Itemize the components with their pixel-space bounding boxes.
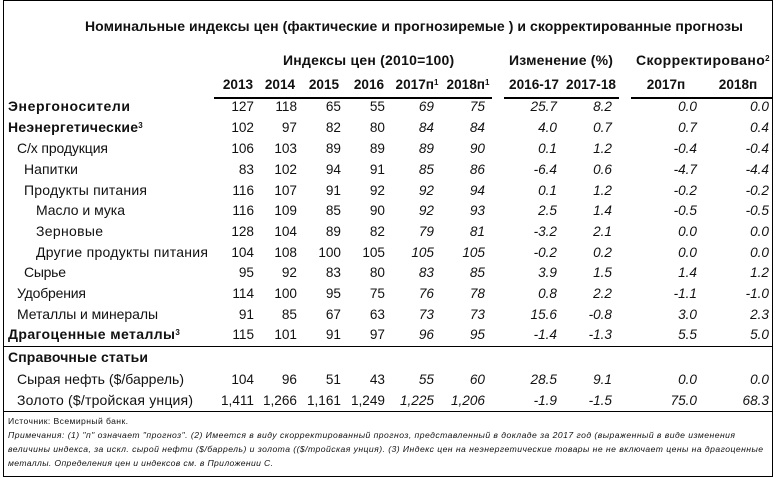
data: forecasts, changes, adjustments: 1.5 [593,265,612,280]
data: forecasts, changes, adjustments: 0.0 [750,99,769,114]
footnotes: металлы. Определения цен и индексов см. в Приложении С. [8,458,273,468]
data: forecasts, changes, adjustments: 95 [470,327,485,342]
data: forecasts, changes, adjustments: -0.4 [674,141,697,156]
data: forecasts, changes, adjustments: 76 [419,286,434,301]
row labels: 3 [138,121,143,130]
data: forecasts, changes, adjustments: 2.1 [592,224,612,239]
footnotes: величины индекса, за искл. сырой нефти ($/баррель) и золота (($/тройская унция). (3) Индекс цен на неэнергетические товары не не включает цены на драгоценные [8,444,763,454]
row labels: Энергоносители [8,98,130,114]
data: price indices actual: 85 [282,307,297,322]
group heading: adjusted: 2 [765,54,770,63]
data: price indices actual: 91 [239,307,254,322]
data: forecasts, changes, adjustments: 0.6 [593,162,612,177]
data: forecasts, changes, adjustments: 25.7 [530,99,557,114]
data: forecasts, changes, adjustments: 0.0 [678,372,697,387]
data: forecasts, changes, adjustments: 60 [470,372,485,387]
group heading: price indices: Индексы цен (2010=100) [283,52,454,68]
data: forecasts, changes, adjustments: 89 [419,141,434,156]
data: price indices actual: 55 [370,99,385,114]
data: price indices actual [221,99,385,408]
data: price indices actual: 90 [370,203,385,218]
data: forecasts, changes, adjustments: -0.5 [674,203,697,218]
data: forecasts, changes, adjustments: 9.1 [593,372,612,387]
data: forecasts, changes, adjustments: -4.7 [674,162,697,177]
data: forecasts, changes, adjustments: -0.2 [534,245,557,260]
data: price indices actual: 100 [318,245,341,260]
table header [214,52,772,99]
data: forecasts, changes, adjustments: 5.5 [678,327,697,342]
data: price indices actual: 96 [282,372,297,387]
data: price indices actual: 65 [326,99,341,114]
data: forecasts, changes, adjustments: -1.0 [746,286,769,301]
data: forecasts, changes, adjustments: 73 [419,307,434,322]
data: forecasts, changes, adjustments: 85 [470,265,485,280]
data: price indices actual: 118 [275,99,297,114]
footnotes [8,416,763,468]
row labels: Удобрения [17,285,86,301]
data: forecasts, changes, adjustments: 0.7 [593,120,612,135]
data: price indices actual: 94 [326,162,341,177]
data: price indices actual: 82 [326,120,341,135]
data: forecasts, changes, adjustments: 73 [470,307,485,322]
year labels: 2017п [647,77,685,92]
data: forecasts, changes, adjustments: 4.0 [538,120,557,135]
row labels: Неэнергетические [8,119,138,135]
data: forecasts, changes, adjustments: 1.4 [593,203,612,218]
data: forecasts, changes, adjustments: 105 [462,245,485,260]
data: price indices actual: 89 [326,224,341,239]
year labels: 2014 [265,77,296,92]
data: forecasts, changes, adjustments: 85 [419,162,434,177]
data: forecasts, changes, adjustments: 96 [419,327,434,342]
data: forecasts, changes, adjustments: 0.1 [538,183,557,198]
data: price indices actual: 92 [282,265,297,280]
data: forecasts, changes, adjustments: 1.2 [593,183,612,198]
data: forecasts, changes, adjustments: 3.9 [538,265,557,280]
row labels: Масло и мука [36,202,125,218]
data: forecasts, changes, adjustments: 2.2 [592,286,612,301]
data: forecasts, changes, adjustments: -3.2 [534,224,557,239]
data: forecasts, changes, adjustments: 1.2 [593,141,612,156]
data: price indices actual: 83 [239,162,254,177]
data: forecasts, changes, adjustments: 78 [470,286,485,301]
row labels [8,98,208,408]
data: forecasts, changes, adjustments: 15.6 [531,307,557,322]
data: forecasts, changes, adjustments: -1.9 [534,393,557,408]
data: price indices actual: 1,161 [307,393,341,408]
data: forecasts, changes, adjustments: 92 [419,203,434,218]
data: price indices actual: 102 [274,162,297,177]
data: forecasts, changes, adjustments: 94 [470,183,485,198]
data: forecasts, changes, adjustments: 75 [470,99,485,114]
data: price indices actual: 67 [326,307,341,322]
data: price indices actual: 116 [232,203,254,218]
data: price indices actual: 104 [231,245,254,260]
data: price indices actual: 1,411 [221,393,254,408]
data: price indices actual: 102 [231,120,254,135]
year labels: 2017п [396,77,434,92]
data: forecasts, changes, adjustments: 3.0 [678,307,697,322]
data: forecasts, changes, adjustments: 0.0 [678,224,697,239]
row labels: Сырье [24,264,66,280]
data: forecasts, changes, adjustments: -1.3 [589,327,612,342]
data: forecasts, changes, adjustments: 2.3 [749,307,769,322]
data: price indices actual: 103 [274,141,297,156]
data: price indices actual: 75 [370,286,385,301]
data: forecasts, changes, adjustments: -0.5 [746,203,769,218]
data: forecasts, changes, adjustments: 79 [419,224,434,239]
data: price indices actual: 80 [370,265,385,280]
data: price indices actual: 116 [232,183,254,198]
data: forecasts, changes, adjustments: 68.3 [743,393,769,408]
data: price indices actual: 89 [326,141,341,156]
data: forecasts, changes, adjustments: 0.0 [750,224,769,239]
row labels: Золото ($/тройская унция) [17,392,193,408]
data: price indices actual: 91 [326,183,341,198]
row labels: Напитки [24,161,78,177]
data: forecasts, changes, adjustments: 0.8 [538,286,557,301]
data: price indices actual: 91 [326,327,341,342]
data: price indices actual: 101 [274,327,297,342]
year labels: 2018п [447,77,485,92]
data: price indices actual: 89 [370,141,385,156]
data: forecasts, changes, adjustments: -0.4 [746,141,769,156]
data: price indices actual: 85 [326,203,341,218]
year labels: 2016 [354,77,385,92]
data: forecasts, changes, adjustments: 92 [419,183,434,198]
row labels: Зерновые [36,223,103,239]
data: forecasts, changes, adjustments: -1.5 [589,393,612,408]
data: forecasts, changes, adjustments: 81 [470,224,485,239]
year labels: 2013 [223,77,254,92]
data: forecasts, changes, adjustments: -1.1 [674,286,697,301]
data: forecasts, changes, adjustments: 0.4 [750,120,769,135]
data: forecasts, changes, adjustments: 0.7 [678,120,697,135]
row labels: 3 [175,328,180,337]
year labels: 2017-18 [566,77,616,92]
data: price indices actual: 108 [274,245,297,260]
data: forecasts, changes, adjustments: 105 [411,245,434,260]
data: price indices actual: 95 [239,265,254,280]
data: forecasts, changes, adjustments: -0.2 [674,183,697,198]
group heading: change: Изменение (%) [509,52,613,68]
data: forecasts, changes, adjustments: 1,206 [451,393,485,408]
data: price indices actual: 128 [231,224,254,239]
data: price indices actual: 127 [231,99,254,114]
data: forecasts, changes, adjustments: 0.0 [750,245,769,260]
data: forecasts, changes, adjustments: 84 [470,120,485,135]
data: forecasts, changes, adjustments: 83 [419,265,434,280]
row labels: Драгоценные металлы [8,326,175,342]
year labels: 1 [434,78,439,87]
data: price indices actual: 95 [326,286,341,301]
data: price indices actual: 97 [282,120,297,135]
data: forecasts, changes, adjustments: -4.4 [746,162,769,177]
data: forecasts, changes, adjustments: 1.2 [750,265,769,280]
year labels: 2018п [719,77,757,92]
data: price indices actual: 1,249 [351,393,385,408]
row labels: С/х продукция [17,140,108,156]
row labels: Справочные статьи [8,349,148,365]
year labels: 2016-17 [509,77,559,92]
data: forecasts, changes, adjustments: 28.5 [530,372,557,387]
year labels [223,77,757,92]
footnotes: Источник: Всемирный банк. [8,416,128,426]
data: price indices actual: 104 [274,224,297,239]
data: forecasts, changes, adjustments: 2.5 [537,203,557,218]
data: forecasts, changes, adjustments: 69 [419,99,434,114]
title: Номинальные индексы цен (фактические и прогнозиремые ) и скорректированные прогнозы [85,18,743,34]
data: forecasts, changes, adjustments: 5.0 [750,327,769,342]
data: price indices actual: 104 [231,372,254,387]
data: forecasts, changes, adjustments: 93 [470,203,485,218]
year labels: 2015 [309,77,340,92]
data: forecasts, changes, adjustments: 1.4 [678,265,697,280]
data: price indices actual: 83 [326,265,341,280]
data: forecasts, changes, adjustments: -0.2 [746,183,769,198]
data: forecasts, changes, adjustments: -1.4 [534,327,557,342]
row labels: Сырая нефть ($/баррель) [17,371,184,387]
data: price indices actual: 106 [231,141,254,156]
footnotes: Примечания: (1) "п" означает "прогноз". (2) Имеется в виду скорректированный прогноз, представленный в докладе за 2017 год (выраженный в виде изменения [8,430,735,440]
data: price indices actual: 43 [370,372,385,387]
data: forecasts, changes, adjustments: 0.1 [538,141,557,156]
data: forecasts, changes, adjustments: -0.8 [589,307,612,322]
data: price indices actual: 91 [370,162,385,177]
data: price indices actual: 82 [370,224,385,239]
data: forecasts, changes, adjustments: 90 [470,141,485,156]
data: forecasts, changes, adjustments: 86 [470,162,485,177]
data: price indices actual: 109 [274,203,297,218]
data: forecasts, changes, adjustments: 0.0 [750,372,769,387]
data: price indices actual: 105 [362,245,385,260]
data: price indices actual: 63 [370,307,385,322]
data: forecasts, changes, adjustments: 1,225 [400,393,434,408]
data: forecasts, changes, adjustments: 84 [419,120,434,135]
data: forecasts, changes, adjustments: 0.0 [678,99,697,114]
data: forecasts, changes, adjustments: 75.0 [671,393,697,408]
row labels: Металлы и минералы [17,306,158,322]
row labels: Продукты питания [24,182,147,198]
data: price indices actual: 51 [326,372,341,387]
data: price indices actual: 80 [370,120,385,135]
data: forecasts, changes, adjustments: 0.0 [678,245,697,260]
data: price indices actual: 1,266 [263,393,297,408]
data: price indices actual: 114 [232,286,254,301]
data: price indices actual: 92 [370,183,385,198]
data: price indices actual: 97 [370,327,385,342]
data: forecasts, changes, adjustments: 0.2 [593,245,612,260]
data: price indices actual: 107 [274,183,297,198]
data: price indices actual: 100 [274,286,297,301]
year labels: 1 [485,78,490,87]
data: forecasts, changes, adjustments [400,99,769,408]
group heading: adjusted: Скорректировано [636,52,765,68]
row labels: Другие продукты питания [36,244,208,260]
data: forecasts, changes, adjustments: 8.2 [593,99,612,114]
data: price indices actual: 115 [232,327,254,342]
data: forecasts, changes, adjustments: 55 [419,372,434,387]
data: forecasts, changes, adjustments: -6.4 [534,162,557,177]
